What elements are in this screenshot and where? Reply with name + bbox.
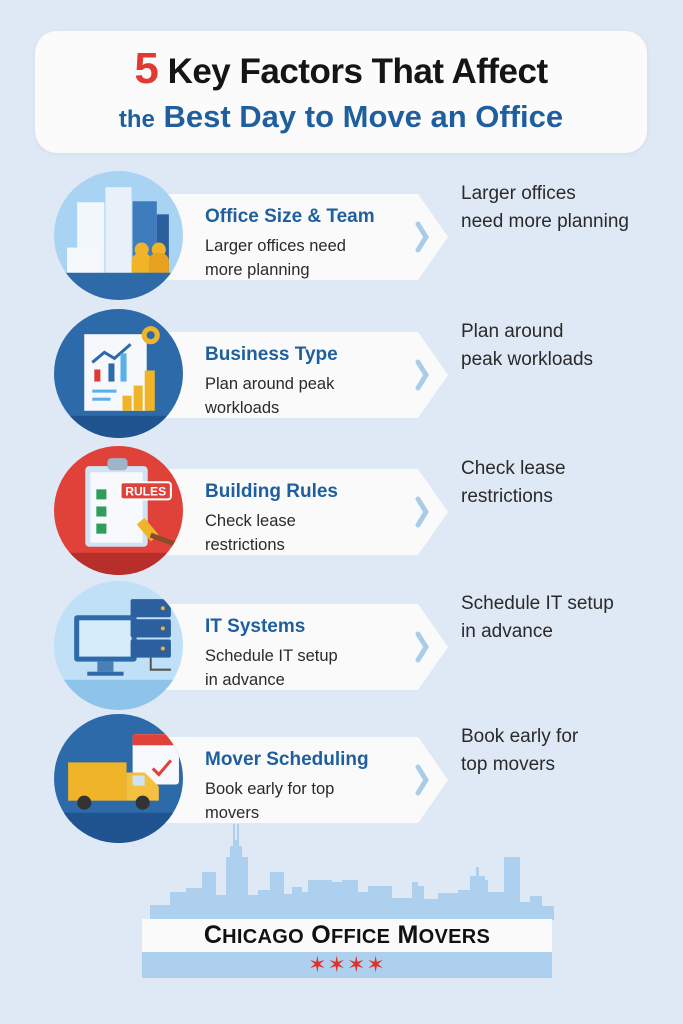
right text 1: Larger offices: [461, 183, 576, 204]
card 5: Book early for top: [205, 780, 334, 798]
icon: rules clipboard: [54, 446, 183, 575]
card 5: movers: [205, 804, 259, 822]
card 3: Check lease: [205, 512, 296, 530]
card 4: in advance: [205, 671, 285, 689]
right text 3: [461, 458, 566, 507]
right text 5: [461, 726, 578, 775]
right text 1: [461, 183, 629, 232]
icon: truck calendar: [54, 714, 183, 843]
row 5: mover scheduling: [54, 714, 578, 843]
card 1: Larger offices need: [205, 237, 346, 255]
right text 5: top movers: [461, 754, 555, 775]
card 5: Mover Scheduling: [205, 749, 369, 770]
row 1: office size: [54, 171, 629, 300]
title: [35, 31, 647, 153]
card 2: [166, 332, 448, 418]
title: 5 Key Factors That Affect: [134, 44, 548, 93]
stars band: [142, 952, 552, 978]
card 2: Plan around peak: [205, 375, 334, 393]
company name band: CHICAGO OFFICE MOVERS: [204, 921, 490, 949]
skyline: [150, 824, 554, 920]
right text 3: restrictions: [461, 486, 553, 507]
row 2: business type: [54, 309, 593, 438]
right text 2: peak workloads: [461, 349, 593, 370]
row 4: IT systems: [54, 581, 614, 710]
card 1: Office Size & Team: [205, 206, 375, 227]
right text 5: Book early for: [461, 726, 578, 747]
card 3: [166, 469, 448, 555]
icon: buildings: [54, 171, 183, 300]
card 4: [166, 604, 448, 690]
card 4: Schedule IT setup: [205, 647, 338, 665]
icon: rules clipboard: RULES: [125, 484, 166, 498]
right text 2: Plan around: [461, 321, 563, 342]
company name band: [142, 919, 552, 952]
right text 2: [461, 321, 593, 370]
right text 4: Schedule IT setup: [461, 593, 614, 614]
logo: skyline and company name: [142, 824, 554, 978]
card 3: restrictions: [205, 536, 285, 554]
icon: chart report: [54, 309, 183, 438]
title: the Best Day to Move an Office: [119, 99, 563, 134]
right text 3: Check lease: [461, 458, 566, 479]
icon: server computer: [54, 581, 183, 710]
card 2: workloads: [205, 399, 279, 417]
card 2: Business Type: [205, 344, 338, 365]
right text 4: [461, 593, 614, 642]
row 3: building rules: [54, 446, 566, 575]
card 1: more planning: [205, 261, 310, 279]
stars band: ✶✶✶✶: [308, 952, 386, 977]
right text 4: in advance: [461, 621, 553, 642]
card 1: [166, 194, 448, 280]
right text 1: need more planning: [461, 211, 629, 232]
card 3: Building Rules: [205, 481, 338, 502]
card 4: IT Systems: [205, 616, 305, 637]
card 5: [166, 737, 448, 823]
